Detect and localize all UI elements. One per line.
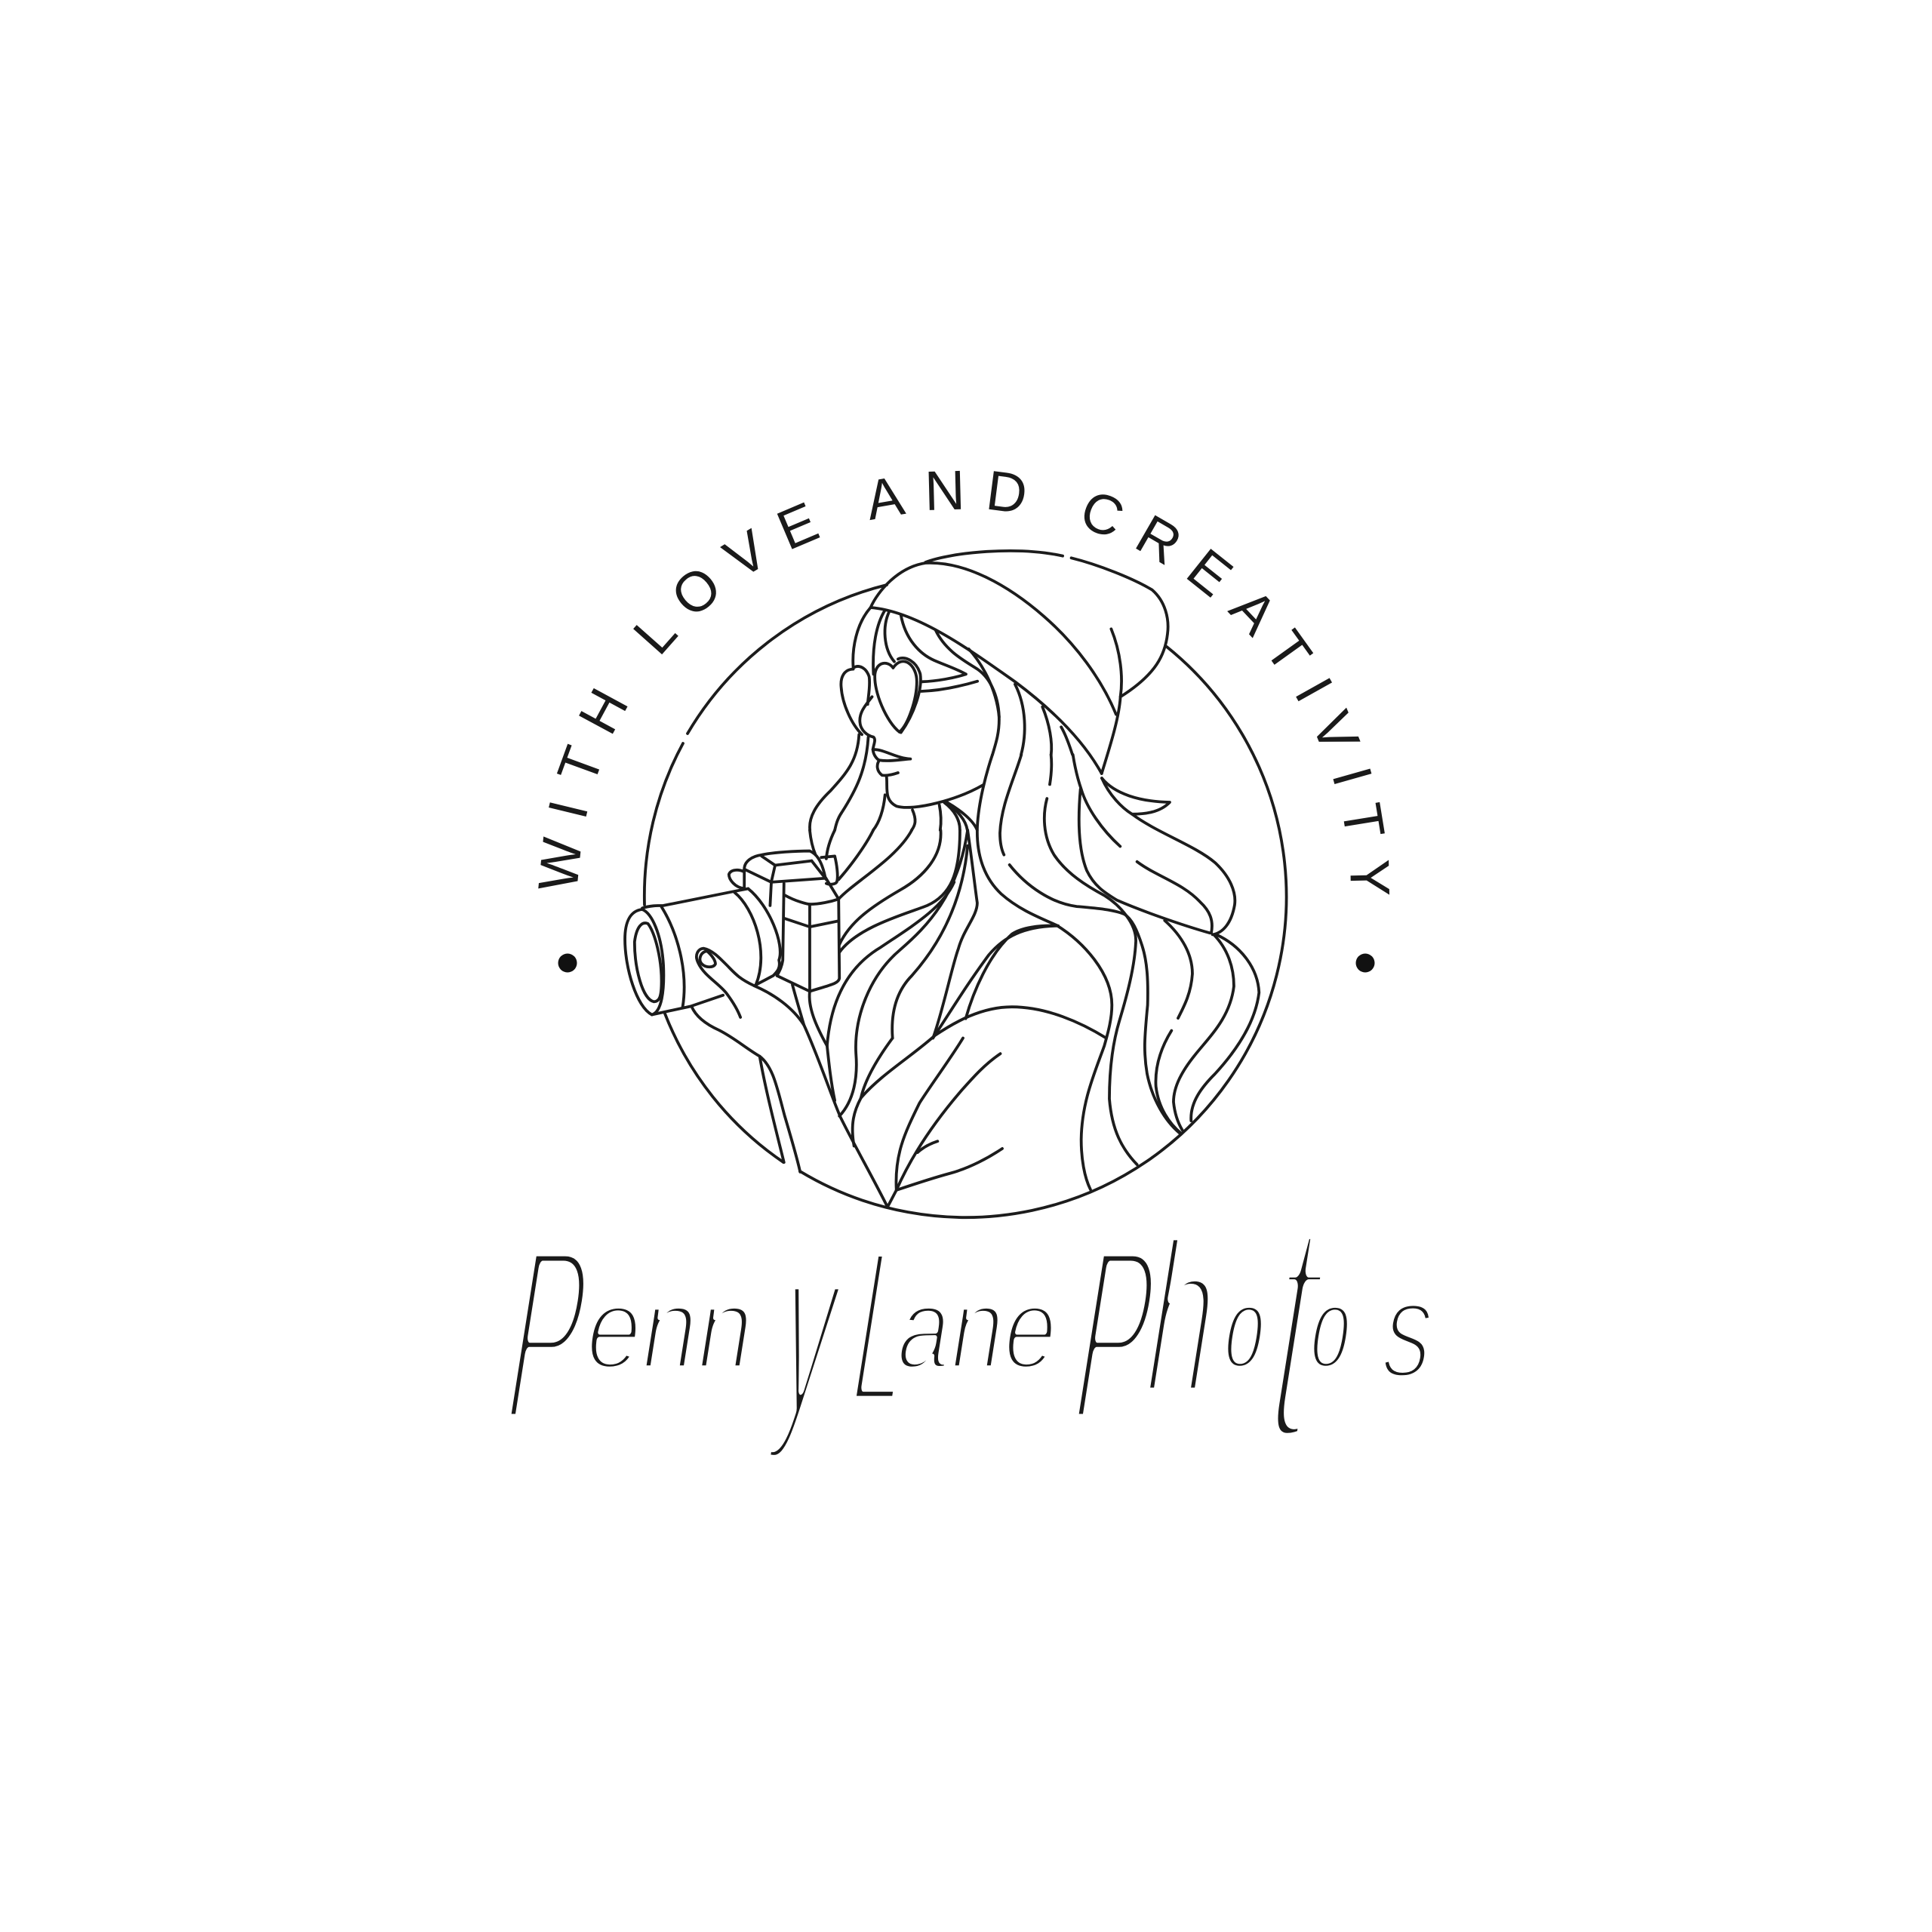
brand name: t — [1246, 1145, 1349, 1509]
hand — [691, 949, 800, 1172]
icon: right dot — [1355, 954, 1375, 972]
brand name: enn — [577, 1263, 764, 1393]
right hair — [977, 755, 1259, 1189]
face profile — [860, 697, 983, 808]
icon: left dot — [558, 954, 577, 972]
brand name: y — [763, 1191, 859, 1463]
brand name: P — [1057, 1195, 1175, 1474]
icon: camera — [625, 851, 839, 1015]
brand name: L — [838, 1204, 928, 1450]
hat — [871, 551, 1168, 774]
heart sunglasses — [841, 658, 977, 734]
lower left hair strands — [810, 830, 977, 1116]
brand name: P — [490, 1195, 608, 1474]
hat, glasses and face — [810, 551, 1168, 830]
brand name: o — [1216, 1263, 1276, 1392]
brand name — [490, 1145, 1447, 1509]
brand name: o — [1302, 1263, 1362, 1392]
badge circle — [645, 585, 1287, 1217]
sleeve and body — [754, 926, 1106, 1207]
curved tagline: WITH LOVE AND CREATIVITY — [538, 471, 1390, 895]
brand name: h — [1130, 1194, 1237, 1441]
upper hair strands — [810, 608, 1072, 830]
brand name: s — [1373, 1252, 1447, 1407]
camera, hand, body — [625, 830, 1106, 1207]
brand name: ane — [889, 1264, 1069, 1394]
